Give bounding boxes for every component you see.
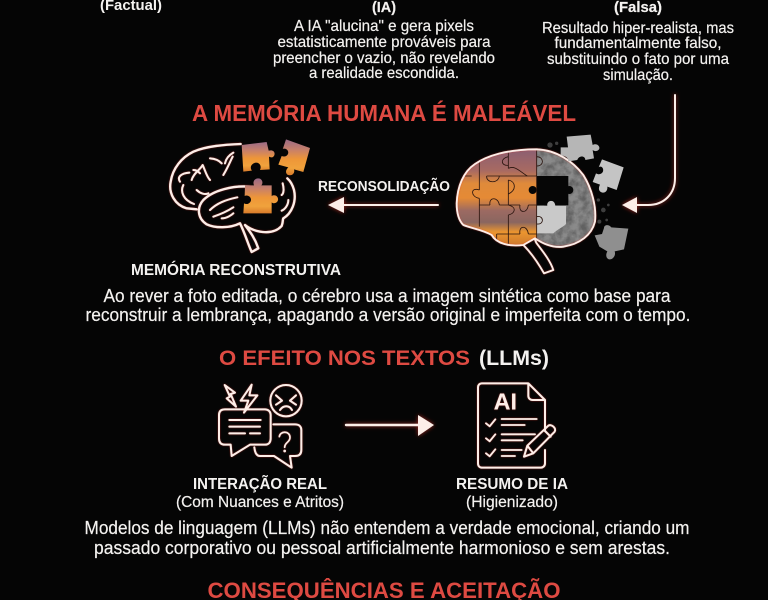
text block: IA column: a realidade escondida. xyxy=(309,65,459,82)
text block: LLM explanation: Modelos de linguagem (LLMs) não entendem a verdade emocional, criando um xyxy=(84,518,690,538)
arrow: false result into brain xyxy=(622,95,675,213)
text block: IA column: estatisticamente prováveis para xyxy=(278,34,491,51)
text block: IA column xyxy=(273,0,495,82)
text block: memory explanation: Ao rever a foto editada, o cérebro usa a imagem sintética como base para xyxy=(104,286,671,306)
heading: memória humana: A MEMÓRIA HUMANA É MALEÁVEL xyxy=(192,99,576,126)
label: resumo de IA: RESUMO DE IA xyxy=(456,476,568,493)
text block: LLM explanation: passado corporativo ou pessoal artificialmente harmonioso e sem arestas. xyxy=(94,538,670,558)
icon: AI document xyxy=(478,383,555,468)
text block: memory explanation: reconstruir a lembrança, apagando a versão original e imperfeita com o tempo. xyxy=(86,305,690,325)
icon: hybrid puzzle brain xyxy=(453,135,628,273)
loose puzzle piece bottom xyxy=(595,225,628,259)
text block: Falsa column: substituindo o fato por uma xyxy=(547,51,729,68)
text block: Falsa column: fundamentalmente falso, xyxy=(554,35,722,52)
label: memória reconstrutiva: MEMÓRIA RECONSTRUTIVA xyxy=(131,261,341,279)
arrow: interaction to summary xyxy=(346,415,434,436)
icon: tense conversation xyxy=(219,385,302,468)
label: resumo de IA: (Higienizado) xyxy=(466,494,558,511)
brain outline xyxy=(457,149,595,273)
label: interação real: INTERAÇÃO REAL xyxy=(193,475,327,493)
text block: IA column: A IA "alucina" e gera pixels xyxy=(294,18,474,35)
brain fill xyxy=(458,150,594,246)
arrow: reconsolidation to the left xyxy=(328,197,438,213)
icon: AI document: AI xyxy=(494,388,517,414)
loose puzzle piece middle xyxy=(593,159,624,193)
text block: IA column: preencher o vazio, não revelando xyxy=(273,50,495,67)
label: resumo de IA xyxy=(456,476,568,511)
puzzle piece centre xyxy=(243,178,278,213)
heading: efeito nos textos: O EFEITO NOS TEXTOS xyxy=(219,346,470,370)
text block: Falsa column xyxy=(542,0,734,84)
text block: Falsa column: Resultado hiper-realista, mas xyxy=(542,20,734,37)
label: reconsolidação: RECONSOLIDAÇÃO xyxy=(318,177,450,195)
dust particles xyxy=(547,142,610,232)
heading: efeito nos textos: (LLMs) xyxy=(479,346,549,370)
text block: Falsa column: simulação. xyxy=(603,67,673,84)
label: interação real: (Com Nuances e Atritos) xyxy=(176,494,344,511)
label: interação real xyxy=(176,475,344,511)
puzzle piece top left xyxy=(242,142,275,172)
icon: reconstructed brain with puzzle pieces xyxy=(170,139,310,252)
loose puzzle piece top xyxy=(561,135,599,161)
text block: LLM explanation xyxy=(84,518,690,558)
text block: memory explanation xyxy=(86,286,690,325)
puzzle piece top right xyxy=(278,139,310,175)
